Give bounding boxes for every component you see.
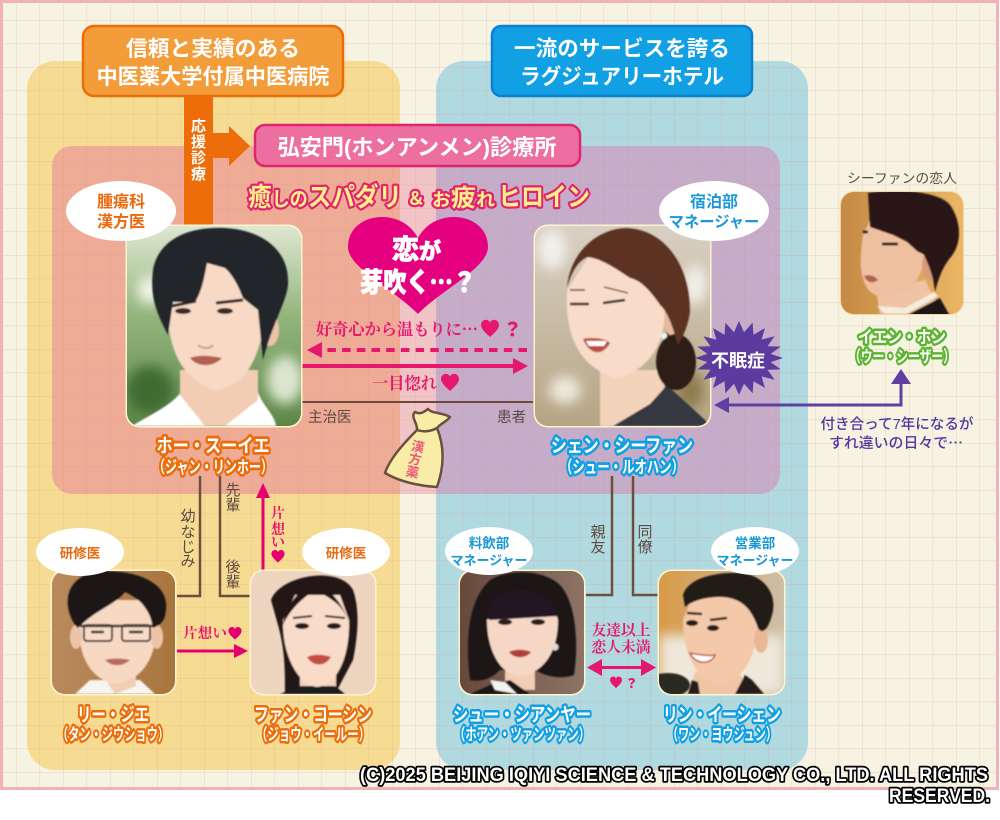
relation lines: childhood friend, senior and junior: じ	[180, 539, 196, 556]
arrow: couple link	[714, 369, 911, 413]
portrait: Fan Kexin	[250, 570, 376, 696]
relation lines: childhood friend, senior and junior: 輩	[225, 574, 241, 591]
label: curiosity to warmth: ？	[503, 320, 522, 341]
arrow: support to clinic: 援	[191, 134, 206, 151]
relation lines: childhood friend, senior and junior: 後	[225, 559, 241, 576]
arrow: unrequited love to Fan	[177, 625, 248, 658]
icon: herbal medicine bag: 方	[407, 451, 423, 468]
heading: hotel: ラグジュアリーホテル	[520, 64, 724, 89]
relation lines: childhood friend, senior and junior: な	[180, 524, 196, 541]
relation lines: best friend, colleague	[586, 476, 658, 595]
subtitle	[248, 182, 590, 212]
name: Lin Yichen: リン・イーシェン	[663, 705, 781, 726]
arrow: support to clinic: 応	[191, 118, 206, 135]
heading: clinic	[255, 125, 580, 166]
arrow: solid to patient	[302, 358, 528, 374]
name: Li Jie	[57, 705, 169, 744]
subtitle: 癒しのスパダリ	[248, 182, 402, 212]
icon: herbal medicine bag	[385, 409, 450, 487]
heading: hospital	[83, 26, 343, 96]
relation lines: childhood friend, senior and junior: 先	[225, 482, 241, 499]
text: seven years together: すれ違いの日々で…	[829, 432, 963, 453]
arrow: more than friends: ？	[625, 676, 638, 691]
arrow: unrequited love to He: い	[271, 536, 285, 551]
name: Shen Xifan	[551, 436, 693, 477]
tag: oncology doctor	[66, 181, 176, 241]
arrow: unrequited love to He: 想	[271, 521, 286, 538]
arrow: unrequited love to He	[256, 483, 286, 570]
tag: lodging manager: 宿泊部	[690, 193, 738, 211]
heading: hotel	[492, 26, 752, 96]
tag: sales manager	[711, 527, 799, 575]
panel: clinic group	[52, 146, 780, 494]
relation lines: childhood friend, senior and junior: み	[180, 553, 196, 570]
label: Xifan's lover: シーファンの恋人	[847, 171, 957, 186]
arrow: more than friends: 恋人未満	[592, 638, 650, 656]
name: Yan Hong: （ウー・シーザー）	[849, 348, 955, 366]
portrait: Shen Xifan	[534, 224, 712, 428]
name: Yan Hong: イエン・ホン	[858, 328, 946, 347]
name: Fan Kexin: （ジョウ・イールー）	[256, 725, 370, 744]
name: He Suiye: ホー・スーイエ	[156, 436, 270, 457]
icon: herbal medicine bag: 薬	[404, 464, 420, 481]
name: He Suiye	[153, 436, 273, 477]
badge: insomnia	[695, 321, 783, 395]
tag: oncology doctor: 漢方医	[97, 212, 145, 231]
tag: food and beverage manager: 料飲部	[469, 535, 510, 551]
name: Xue Xiangya: （ホアン・ツァンツァン）	[454, 725, 590, 744]
label: curiosity to warmth: 好奇心から温もりに…	[316, 316, 478, 340]
subtitle: ＆	[407, 189, 425, 209]
text: seven years together	[820, 415, 974, 453]
tag: resident right	[302, 528, 390, 576]
portrait: Xue Xiangya	[458, 570, 586, 696]
copyright: (C)2025 BEIJING IQIYI SCIENCE & TECHNOLOGY CO., LTD. ALL RIGHTS	[360, 765, 988, 786]
name: Fan Kexin: ファン・コーシン	[254, 705, 372, 726]
name: Xue Xiangya: シュー・シアンヤー	[453, 705, 591, 726]
heading: hospital: 中医薬大学付属中医病院	[96, 65, 330, 89]
name: He Suiye: （ジャン・リンホー）	[153, 458, 273, 477]
arrow: support to clinic: 診	[191, 150, 206, 167]
relation lines: best friend, colleague: 同	[637, 524, 653, 541]
tag: resident left: 研修医	[60, 546, 100, 561]
name: Xue Xiangya	[453, 705, 591, 744]
relation lines: childhood friend, senior and junior	[177, 476, 250, 596]
portrait: Yan Hong	[840, 191, 964, 316]
name: Li Jie: （タン・ジウショウ）	[57, 725, 169, 744]
tag: food and beverage manager	[445, 527, 533, 575]
relation lines: childhood friend, senior and junior: 幼	[180, 508, 196, 525]
relation: doctor and patient: 主治医	[308, 409, 352, 426]
arrow: more than friends: 友達以上	[592, 621, 650, 639]
name: Shen Xifan: （シュー・ルオハン）	[560, 458, 684, 477]
copyright: RESERVED.	[889, 786, 990, 807]
text: seven years together: 付き合って7年になるが	[820, 415, 974, 433]
tag: oncology doctor: 腫瘍科	[97, 193, 145, 211]
tag: lodging manager: マネージャー	[669, 214, 759, 231]
name: Fan Kexin	[254, 705, 372, 744]
subtitle: ヒロイン	[498, 182, 590, 212]
relation: doctor and patient	[302, 402, 533, 426]
relation: doctor and patient: 患者	[497, 409, 526, 426]
badge: insomnia: 不眠症	[711, 351, 765, 371]
icon: heart callout: 芽吹く…？	[360, 261, 476, 300]
arrow: unrequited love to He: 片	[271, 505, 285, 522]
portrait: He Suiye	[126, 224, 303, 428]
name: Yan Hong	[849, 328, 955, 366]
portrait: Lin Yichen	[646, 570, 786, 697]
portrait: Li Jie	[50, 570, 176, 696]
relation lines: best friend, colleague: 親	[590, 524, 606, 541]
arrow: dashed to doctor	[307, 342, 527, 358]
arrow: support to clinic: 療	[191, 166, 206, 183]
panel: hotel group	[436, 61, 808, 770]
arrow: unrequited love to Fan: 片想い	[183, 625, 227, 642]
name: Shen Xifan: シェン・シーファン	[551, 436, 693, 457]
panel: hospital group	[27, 61, 400, 770]
name: Li Jie: リー・ジエ	[77, 705, 149, 726]
subtitle: お疲れ	[432, 185, 495, 212]
label: love at first sight: 一目惚れ	[372, 374, 437, 393]
name: Lin Yichen: （ワン・ヨウジュン）	[667, 725, 777, 744]
tag: sales manager: マネージャー	[716, 553, 794, 568]
heading: hospital: 信頼と実績のある	[126, 37, 300, 61]
icon: heart callout: 恋が	[392, 235, 441, 265]
name: Lin Yichen	[663, 705, 781, 744]
arrow: support to clinic	[184, 96, 250, 226]
relation lines: childhood friend, senior and junior: 輩	[225, 497, 241, 514]
copyright	[360, 765, 990, 807]
heading: hotel: 一流のサービスを誇る	[514, 37, 730, 61]
relation lines: best friend, colleague: 僚	[637, 539, 653, 556]
heading: clinic: 弘安門(ホンアンメン)診療所	[278, 135, 556, 160]
relation lines: best friend, colleague: 友	[590, 539, 606, 556]
tag: lodging manager	[659, 181, 769, 241]
icon: herbal medicine bag: 漢	[410, 438, 426, 455]
tag: sales manager: 営業部	[735, 535, 776, 551]
tag: food and beverage manager: マネージャー	[450, 553, 528, 568]
tag: resident right: 研修医	[326, 546, 366, 561]
icon: heart callout	[348, 217, 488, 314]
arrow: more than friends	[587, 621, 656, 691]
tag: resident left	[36, 528, 124, 576]
